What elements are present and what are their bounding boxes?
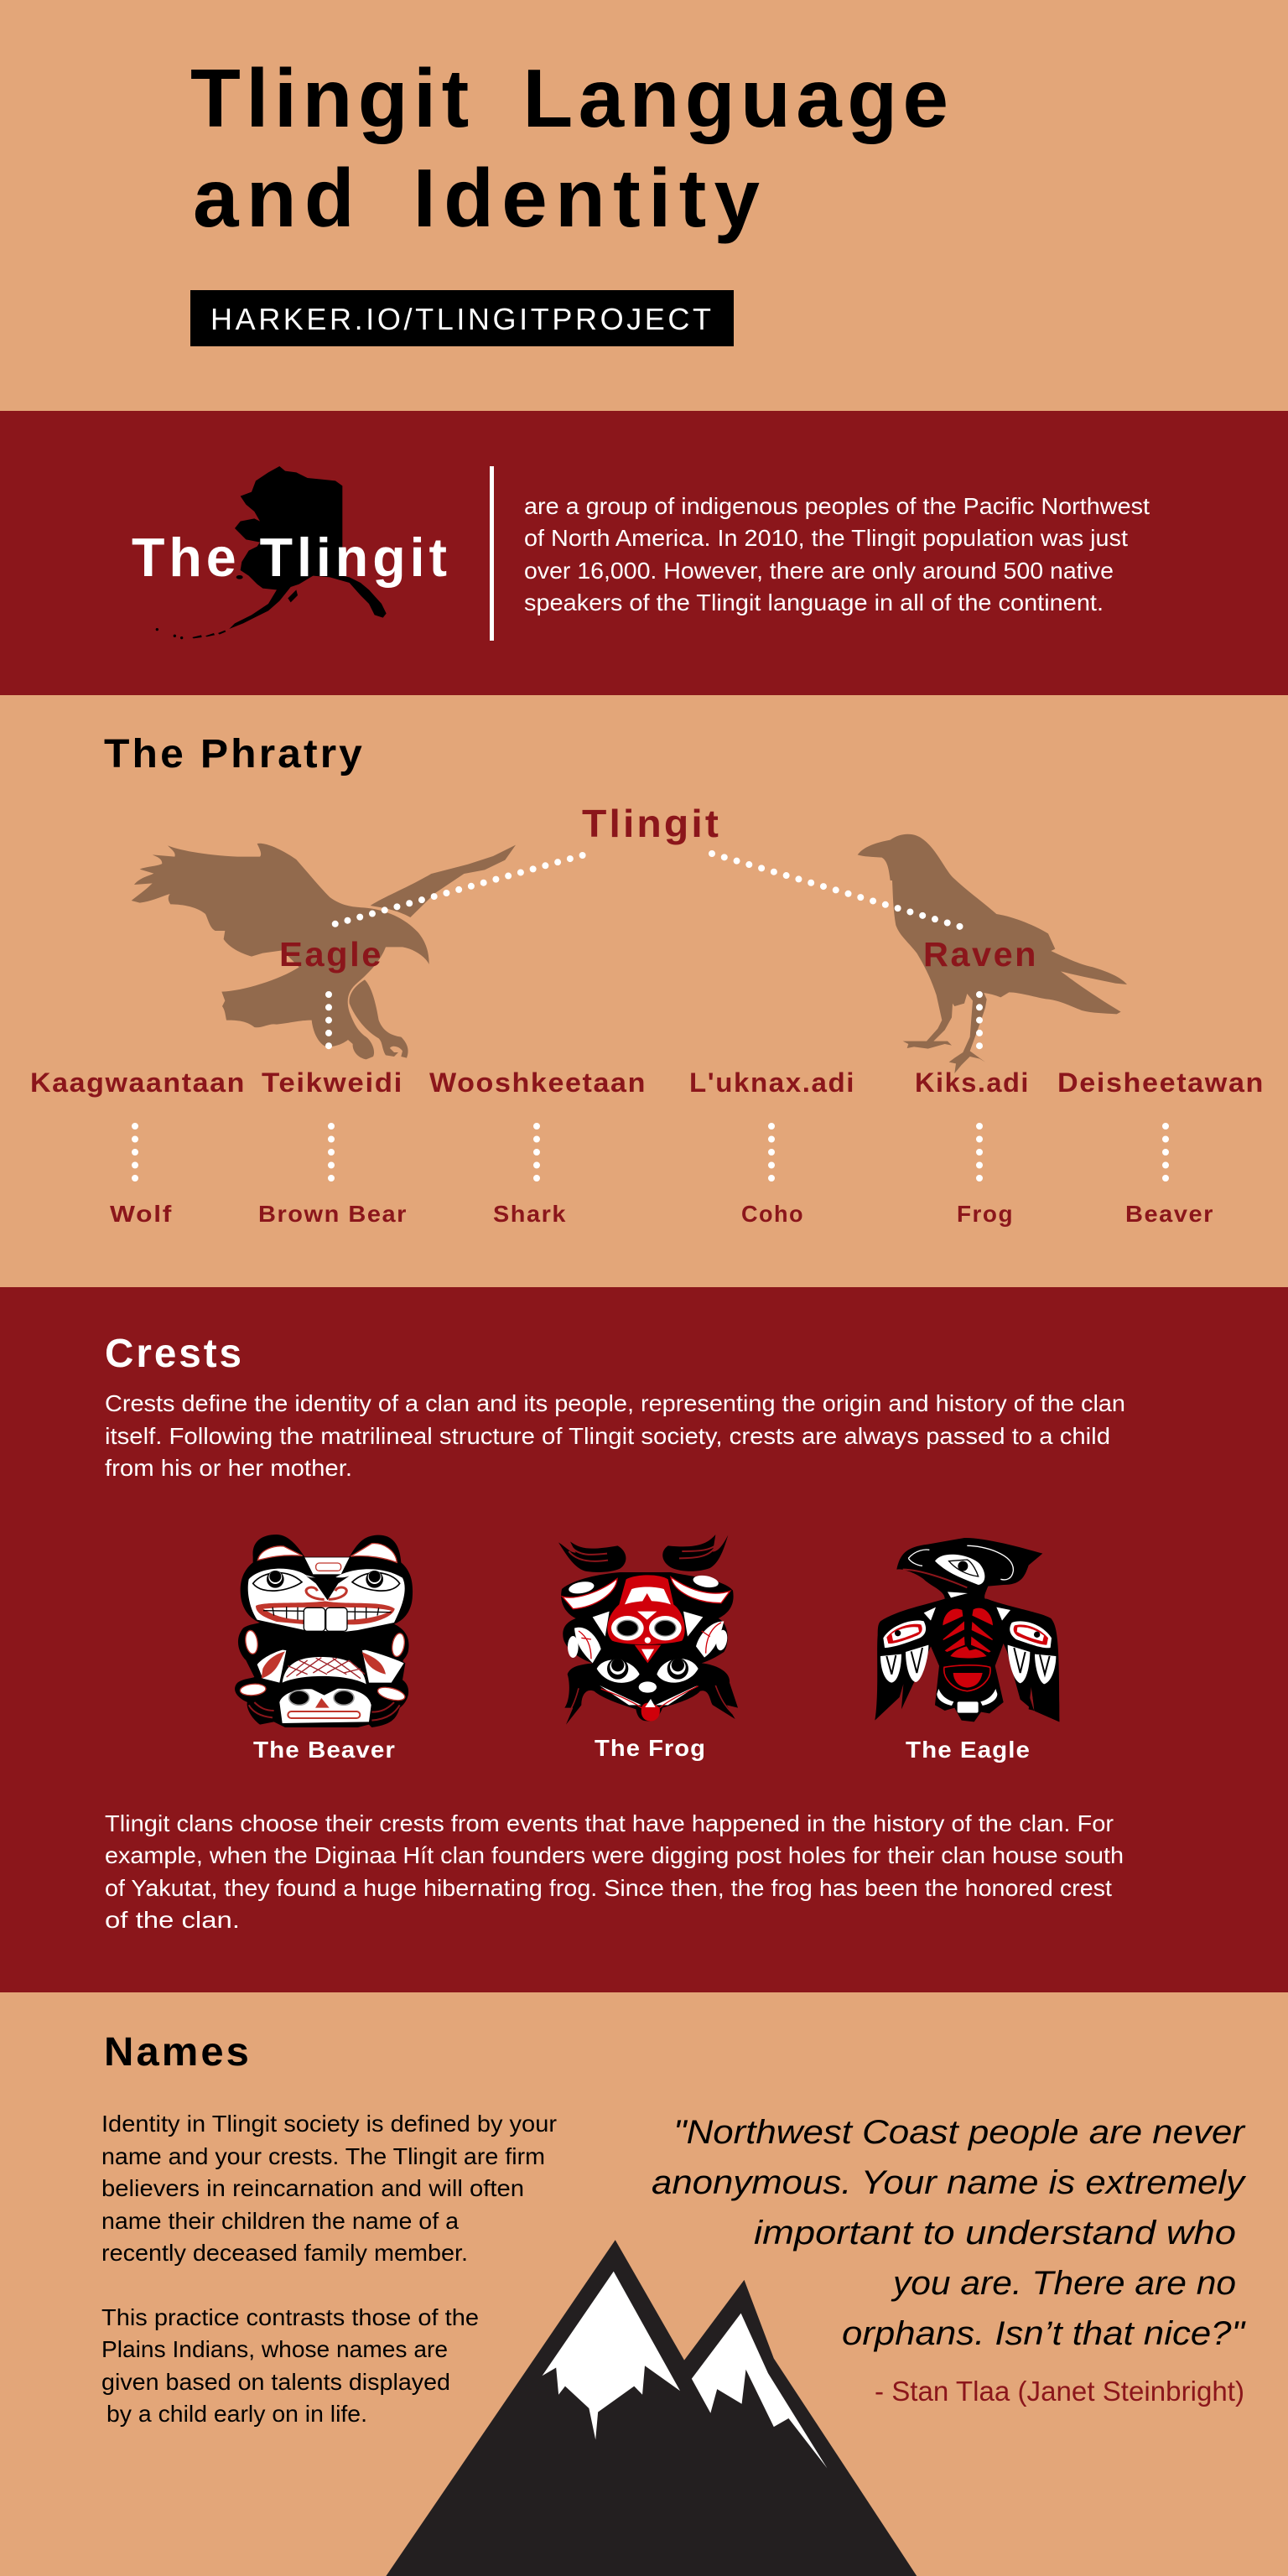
icon: beaver crest [235,1535,413,1727]
title: and Identity [193,152,766,244]
clan names: Deisheetawan [1057,1067,1265,1098]
intro text: speakers of the Tlingit language in all of the continent. [524,589,1104,615]
icon: eagle silhouette [132,844,516,1059]
panel: crests [0,1287,1288,1992]
panel: title header [190,52,955,346]
clan crest names: Wolf [110,1201,173,1227]
names text: believers in reincarnation and will often [101,2175,524,2201]
panel: the Tlingit intro [0,411,1288,695]
moiety label: Raven: Raven [923,935,1038,974]
clan names [30,1067,1265,1098]
names text: This practice contrasts those of the [101,2304,479,2330]
icon: raven silhouette [858,834,1127,1073]
crests history text [105,1810,1124,1933]
quote: "Northwest Coast people are never [673,2114,1246,2151]
crests history text: example, when the Diginaa Hít clan founders were digging post holes for their clan house south [105,1842,1124,1868]
icon: frog crest [558,1535,738,1725]
heading: Crests: Crests [105,1332,244,1376]
crests intro text [105,1390,1125,1481]
panel: the phratry [30,732,1265,1227]
names text: Plains Indians, whose names are [101,2336,448,2362]
quote [652,2114,1247,2352]
quote: you are. There are no [891,2265,1236,2302]
url badge: HARKER.IO/TLINGITPROJECT [210,302,711,336]
clan names: Kaagwaantaan [30,1067,246,1098]
quote attribution: - Stan Tlaa (Janet Steinbright) [875,2376,1244,2407]
illustration: snow-capped mountains [386,2240,917,2576]
crests intro text: from his or her mother. [105,1455,352,1481]
names text: name and your crests. The Tlingit are firm [101,2143,545,2169]
intro text: are a group of indigenous peoples of the Pacific Northwest [524,493,1150,519]
crests intro text: itself. Following the matrilineal structure of Tlingit society, crests are always passed to a child [105,1423,1110,1449]
clan names: Wooshkeetaan [429,1067,647,1098]
quote: anonymous. Your name is extremely [652,2164,1247,2201]
quote: orphans. Isn’t that nice?" [842,2315,1246,2352]
label: The Frog: The Frog [595,1735,706,1761]
panel: names [101,2030,1247,2576]
clan names: Kiks.adi [915,1067,1030,1098]
intro text: of North America. In 2010, the Tlingit population was just [524,525,1128,551]
names text: name their children the name of a [101,2208,459,2234]
clan crest names: Frog [957,1201,1014,1227]
clan crest names: Beaver [1125,1201,1214,1227]
names text: Identity in Tlingit society is defined by your [101,2111,557,2137]
intro text: over 16,000. However, there are only around 500 native [524,558,1114,584]
label: The Beaver: The Beaver [253,1737,396,1763]
quote: important to understand who [754,2215,1236,2251]
intro text [524,493,1150,615]
vertical divider [490,466,494,641]
label: The Tlingit: The Tlingit [132,527,451,588]
names text: by a child early on in life. [106,2401,367,2427]
clan crest names: Coho [741,1201,804,1227]
clan names: Teikweidi [262,1067,403,1098]
moiety label: Eagle: Eagle [279,935,383,974]
title [190,52,955,244]
heading: The Phratry: The Phratry [104,732,365,776]
clan crest names: Brown Bear [258,1201,408,1227]
names text: given based on talents displayed [101,2369,450,2395]
clan names: L'uknax.adi [689,1067,855,1098]
icon: eagle crest [875,1538,1059,1722]
title: Tlingit Language [190,52,955,144]
root label: Tlingit: Tlingit [582,802,721,845]
url badge [190,290,734,346]
crests history text: of Yakutat, they found a huge hibernating frog. Since then, the frog has been the honored crest [105,1875,1112,1901]
clan crest names [110,1201,1214,1227]
icon: Alaska silhouette map [156,466,387,639]
label: The Eagle: The Eagle [906,1737,1031,1763]
crests intro text: Crests define the identity of a clan and its people, representing the origin and history of the clan [105,1390,1125,1416]
crests history text: Tlingit clans choose their crests from events that have happened in the history of the clan. For [105,1810,1114,1836]
names text: recently deceased family member. [101,2240,468,2266]
clan crest names: Shark [493,1201,567,1227]
dotted connectors to moieties and clans [135,854,1166,1179]
crests history text: of the clan. [105,1907,240,1933]
heading: Names: Names [104,2030,252,2075]
names text [101,2111,557,2427]
